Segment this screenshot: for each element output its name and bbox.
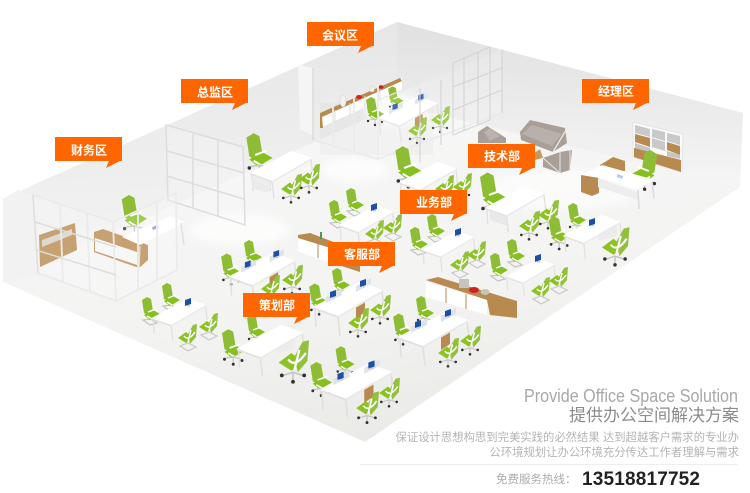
description line 1: 保证设计思想构思到完美实践的必然结果 达到超越客户需求的专业办 (396, 430, 739, 444)
right desk group (549, 203, 630, 267)
meeting room glass partitions (313, 47, 502, 163)
customer service desks (221, 240, 391, 338)
slogan text block (396, 386, 739, 459)
finance glass partition (33, 193, 177, 301)
label: 技术部: 技术部 (484, 148, 520, 164)
label: 会议区: 会议区 (322, 28, 358, 42)
hotline (360, 464, 738, 490)
finance office (39, 195, 185, 268)
label: 技术部 (468, 144, 535, 175)
planning department desks (142, 283, 481, 424)
meeting room cabinets and table (320, 78, 450, 144)
label: 会议区 (307, 22, 374, 53)
technical department desks (395, 146, 559, 241)
label: 总监区: 总监区 (197, 84, 233, 100)
label: 客服部: 客服部 (344, 246, 380, 262)
business department desks (329, 188, 568, 304)
manager bookcase, desk and chair (581, 122, 683, 209)
chinese heading: 提供办公空间解决方案 (569, 406, 739, 425)
director desk with chairs (246, 133, 320, 204)
lounge sofas (478, 120, 572, 173)
label: 经理区: 经理区 (598, 84, 634, 98)
director glass partition (166, 125, 245, 225)
hotline number: 13518817752 (582, 469, 700, 490)
label: 客服部 (328, 242, 395, 273)
label: 策划部: 策划部 (259, 298, 295, 312)
label: 经理区 (582, 79, 649, 110)
label: 总监区 (181, 79, 248, 110)
description line 2: 公环境规划让办公环境充分传达工作者理解与需求 (489, 445, 739, 459)
long cabinet right (426, 277, 517, 318)
hotline label: 免费服务热线： (496, 472, 576, 486)
label: 财务区 (55, 137, 122, 168)
long cabinet centre (298, 232, 360, 272)
label: 策划部 (243, 293, 310, 324)
label: 业务部: 业务部 (416, 194, 452, 210)
label: 财务区: 财务区 (71, 142, 107, 158)
label: 业务部 (400, 190, 467, 221)
